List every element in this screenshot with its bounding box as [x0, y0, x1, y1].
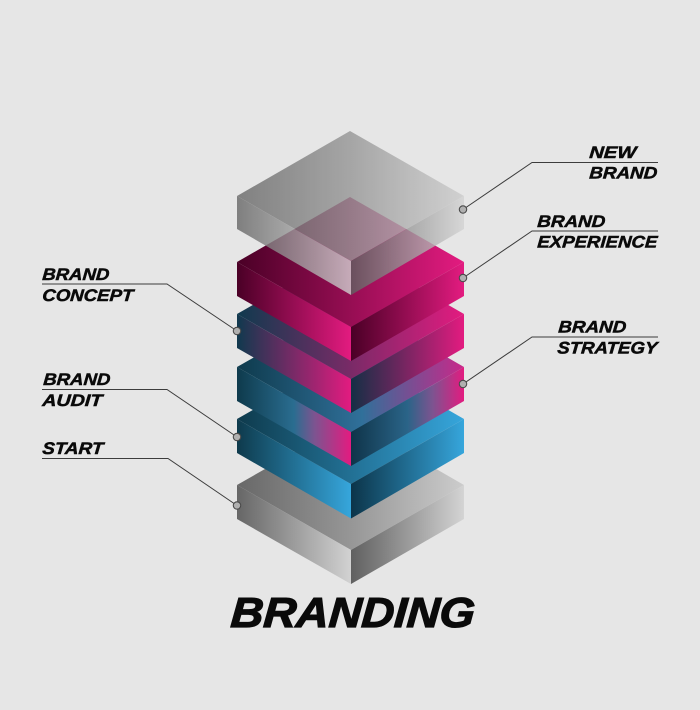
callout: new brand: BRAND [589, 164, 658, 182]
callout: brand experience [459, 212, 659, 282]
layer: new brand (translucent grey top slab) [237, 131, 464, 295]
title: BRANDING [229, 589, 477, 636]
layer: start (grey base slab) [237, 420, 464, 584]
callout: brand audit: BRAND [43, 370, 111, 389]
callout: brand experience: BRAND [537, 212, 606, 231]
callout: brand concept: CONCEPT [42, 286, 136, 305]
callout: brand experience: EXPERIENCE [537, 233, 659, 251]
layer: brand audit (blue slab) [237, 354, 464, 518]
layer: brand strategy (blue to magenta slab) [237, 302, 464, 466]
callout: brand strategy [459, 318, 660, 388]
callout: start: START [42, 439, 106, 458]
layer: brand experience (magenta slab) [237, 197, 464, 361]
callout: brand concept: BRAND [42, 265, 110, 284]
callout: start [42, 439, 241, 509]
callout: new brand [459, 143, 658, 213]
callout: brand strategy: BRAND [558, 318, 627, 336]
callout: brand concept [42, 265, 241, 335]
callout: new brand: NEW [589, 143, 640, 162]
callout: brand audit: AUDIT [41, 391, 105, 410]
callout: brand audit [41, 370, 241, 441]
layer: brand concept (teal to magenta slab) [237, 249, 464, 413]
callout: brand strategy: STRATEGY [557, 339, 660, 357]
